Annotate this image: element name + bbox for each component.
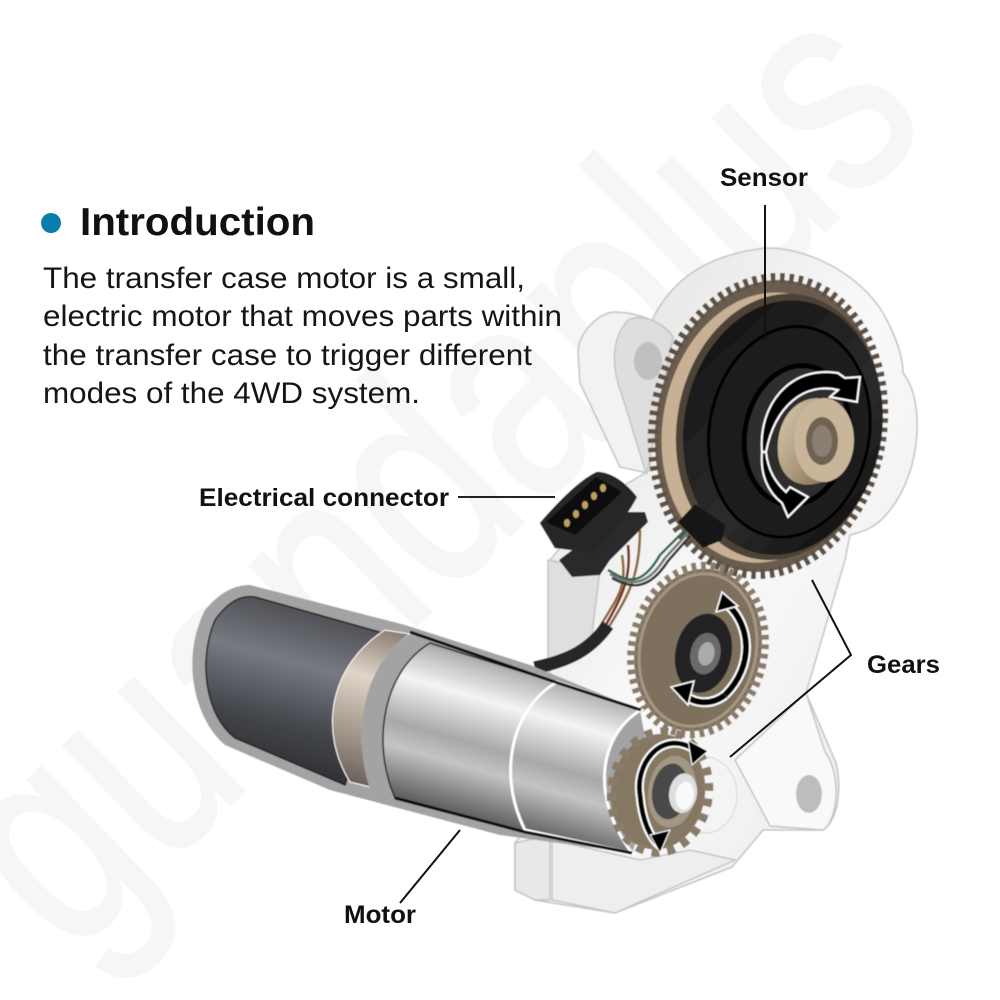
text block: introduction body — [43, 262, 562, 410]
connector wires — [598, 530, 690, 630]
electrical connector — [540, 472, 648, 577]
label: Gears: Gears — [867, 651, 940, 679]
text block: introduction body: modes of the 4WD system. — [43, 377, 420, 410]
leader: gears — [730, 580, 851, 757]
arrows: small gear rotation — [639, 740, 708, 853]
bearing hub — [778, 398, 854, 485]
leader: motor — [400, 830, 460, 903]
text block: introduction body: The transfer case motor is a small, — [43, 262, 525, 295]
gear: large sensor gear — [630, 259, 906, 593]
leader: sensor — [764, 205, 766, 340]
sensor plug — [678, 504, 725, 548]
label: Sensor: Sensor — [720, 164, 808, 192]
diagram: transfer case motor — [192, 248, 917, 913]
arrows: middle gear rotation — [671, 592, 746, 705]
text block: introduction body: electric motor that moves parts within — [43, 300, 562, 333]
text block: introduction body: the transfer case to trigger different — [43, 339, 533, 372]
mounting holes — [634, 342, 822, 833]
motor — [192, 585, 655, 853]
housing — [515, 248, 917, 913]
gear: small pinion gear — [603, 726, 716, 858]
leader: electrical connector — [458, 496, 555, 498]
gear: middle gear — [617, 554, 779, 746]
label: Electrical connector: Electrical connector — [199, 484, 449, 512]
title: Introduction: Introduction — [80, 201, 315, 244]
arrow: large gear rotation down — [762, 452, 808, 517]
cable — [535, 625, 608, 668]
label: Motor: Motor — [344, 901, 416, 929]
arrow: large gear rotation up — [762, 372, 860, 452]
